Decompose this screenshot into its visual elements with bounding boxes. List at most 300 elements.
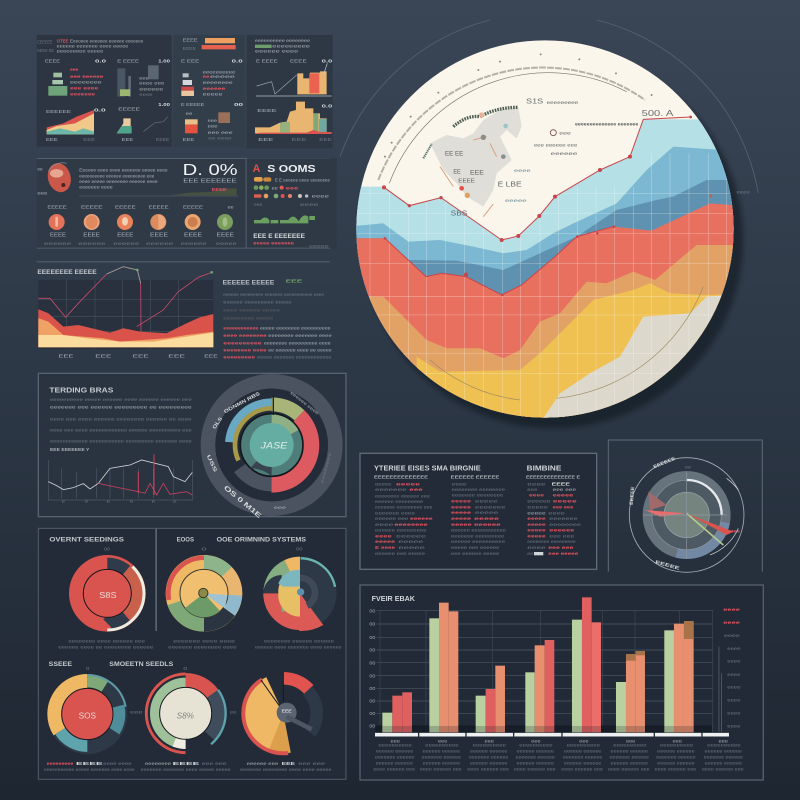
column captions: eeeeeeeeee <box>519 743 553 748</box>
icon row: nutrients: EEEE <box>184 232 202 238</box>
legend rows: ee <box>272 185 278 190</box>
column 3: eee eee <box>548 545 574 550</box>
outer arc <box>340 20 758 193</box>
column captions: eeeeee eeeeee <box>705 749 743 754</box>
column captions: eeeeee eeeeee <box>517 761 555 766</box>
side labels <box>719 607 741 732</box>
legend rows: eeee <box>300 202 319 207</box>
chart: blocks list: EEEE <box>45 59 60 64</box>
map labels: eeee <box>737 189 751 194</box>
header text: EEEE <box>183 38 198 43</box>
column captions: eeeeeeeeee <box>660 743 694 748</box>
column captions: eee <box>579 739 589 744</box>
text block: EEE EEEEEEE Y <box>50 447 89 452</box>
column 2: eeeeeee eeeeeeeee <box>451 533 505 538</box>
captions row 2: eeee eeee <box>103 761 132 766</box>
column 3: eeeee <box>527 528 547 533</box>
chart: right line and area: 0.0 <box>322 103 333 109</box>
text block: notes: eeeeee eeeeeeeee eeeee <box>223 299 292 304</box>
chart: columns small: 1.00 <box>158 102 170 108</box>
column captions <box>373 739 744 772</box>
captions row 1: eeeeeeee eeee eeeeee eee <box>68 639 146 644</box>
chart: stacked area small: EEE <box>83 137 95 142</box>
column 3: eeee <box>527 545 547 550</box>
icon row: nutrients <box>44 205 238 246</box>
donut: ring: USS <box>205 454 219 474</box>
panel: trending donut <box>38 373 346 520</box>
column 3: eeeee <box>553 493 574 498</box>
column 1: eeeeee eeeeeeeee <box>375 528 427 533</box>
column 3: eeeee <box>553 499 578 504</box>
text block: notes: eeeeeeeeeeee <box>223 325 259 330</box>
column captions: eeeeee eeeeee <box>423 761 461 766</box>
donut 1: S8S <box>99 591 117 600</box>
column 2: eeeeee eeeeeeeeeee <box>451 528 507 533</box>
header text: eeeeeeeee eeeee <box>57 48 104 53</box>
column 3: eeee <box>527 481 547 486</box>
text block <box>50 397 193 452</box>
heading: right summary: A <box>253 163 261 175</box>
icon row: nutrients: EEEE <box>83 232 100 238</box>
header text: eeeeee eeee <box>255 49 299 54</box>
icon row: nutrients: EEEEE <box>183 205 203 210</box>
chart: stacked area small: 0.0 <box>94 108 106 114</box>
header text: eeeeeeeee <box>272 44 311 49</box>
chart: middle panel blocks: EEE <box>183 137 194 142</box>
chart: stacked area small <box>46 108 106 142</box>
chart: columns small: EEEE <box>156 137 169 142</box>
chart: middle panel blocks: 0.0 <box>232 59 243 65</box>
column 3: eeeee <box>527 516 547 521</box>
baseline <box>375 729 729 740</box>
column captions: eeeeeee eeeeee <box>516 755 556 760</box>
heading: EEEEEEEE EEEEE <box>37 270 97 276</box>
map labels: eeeeeeeeeeeeee eeeeeee <box>575 121 639 127</box>
column 3: eee eeeee <box>548 551 579 556</box>
captions row 1: eeeeee eeee eeeeeee eeee eeeeee <box>255 644 342 649</box>
column captions: eeeeee eeeeee <box>564 749 602 754</box>
chart: middle panel blocks <box>181 59 243 142</box>
text block: notes: EEE <box>286 279 303 285</box>
headings: 0 <box>183 666 188 671</box>
icon row: nutrients: EEEE <box>50 232 66 238</box>
column 1: eeeee <box>398 545 426 550</box>
column captions: eee <box>626 739 636 744</box>
chart: middle panel blocks: 00 <box>234 102 243 108</box>
column captions: eeeeee eeeeee <box>470 761 508 766</box>
grid <box>340 153 740 420</box>
donut: ring: eeeeeeee <box>319 451 333 484</box>
column 3 <box>526 474 582 556</box>
mini trend: EEEE <box>212 187 227 192</box>
column captions: eeeeeeeeee <box>425 743 459 748</box>
column 3: eeeeee <box>549 528 575 533</box>
column captions: eeeeee eeeeee <box>611 761 649 766</box>
column captions: eeee eeeeee eee <box>514 767 556 772</box>
icon row: nutrients: eeeeee <box>44 241 72 246</box>
column 2: eeeee eee eeeeee <box>451 545 500 550</box>
chart: columns small: 1.00 <box>158 59 170 65</box>
column 2: eeeeee eeeeeeeeee <box>451 539 506 544</box>
chart: middle panel blocks: eeeeeeee <box>203 80 234 85</box>
panel: radar chart <box>608 440 762 572</box>
header text: eeeeee eeeeeee eeee eeeee <box>57 43 129 48</box>
chart: middle panel blocks: eeeeee <box>203 86 226 91</box>
column captions: eeeeee eeeeee <box>423 749 461 754</box>
chart: middle panel blocks: eee <box>208 118 218 123</box>
icon: organ: eee <box>37 190 48 195</box>
panel: radar chart: ee <box>685 464 692 469</box>
column 3: ee <box>527 551 534 556</box>
captions row 2 <box>44 761 332 772</box>
text block: eeeeeeeeeeee eeeeeeeeeee eeeeeeeee eeeeeee eeee <box>50 438 192 443</box>
heading: TERDING BRAS <box>49 385 113 394</box>
column captions: eee <box>531 739 541 744</box>
column captions: eeeeeeeeee <box>378 743 412 748</box>
icon row: nutrients: EEEEE <box>115 205 136 210</box>
line chart: e <box>152 499 156 504</box>
chart: middle panel blocks: E EEE <box>181 59 199 64</box>
legend rows: eeee <box>312 194 330 199</box>
chart: right line and area <box>255 59 333 142</box>
panel: radar chart: EEEEEE <box>652 456 676 469</box>
area chart: EEE <box>133 353 149 358</box>
column captions: eeeeeee eeeeee <box>422 755 462 760</box>
donut 4: SOS <box>79 712 96 721</box>
map: EEEE <box>458 179 475 185</box>
chart: middle panel blocks: eee eee <box>208 130 234 135</box>
icon row: nutrients: eeeee <box>216 241 238 246</box>
text block: notes: eeeeeeeeee <box>223 340 263 345</box>
arc scale <box>378 53 653 183</box>
map labels: SBS <box>451 209 467 218</box>
text block: notes: eeeee eeeeeeee eeeeeeeeee <box>260 325 331 330</box>
column 1: eeee <box>375 522 394 527</box>
area chart: EEE <box>204 353 218 358</box>
column 1: eeeeeeee eeeeee eee <box>375 493 431 498</box>
line chart: e <box>130 499 134 504</box>
layer: dark blue <box>356 180 734 296</box>
chart: middle panel blocks: E EEEEE <box>181 102 204 107</box>
column captions: eeeeee eeeeee <box>517 749 555 754</box>
grid and axis labels: 00 <box>369 622 376 627</box>
layer: grey <box>544 296 722 418</box>
text block: eeeeeee eee eeeeee eeeeeeeee ee eeeeeeeee <box>50 405 193 410</box>
column captions: eeeeeeeeee <box>473 743 507 748</box>
line chart: e <box>85 499 89 504</box>
map labels: 500. A <box>642 108 674 118</box>
big number: D. 0% <box>183 162 238 179</box>
chart: blocks list <box>45 59 106 97</box>
captions row 2: eee eee <box>202 761 228 766</box>
column captions: eeeeeee eeeeee <box>610 755 650 760</box>
layer: red <box>356 203 734 418</box>
donut: ring: JASE <box>259 440 288 450</box>
panel: bar chart <box>360 585 763 780</box>
column 1: eeeee <box>398 539 425 544</box>
side labels: eeee <box>723 620 741 625</box>
area chart: EEE <box>168 353 185 358</box>
map labels: eeeeeeeee <box>547 100 579 105</box>
donut: ring: eeeeee eeee <box>289 390 321 416</box>
side labels: eeee <box>727 697 741 702</box>
chart: middle panel blocks: eeeee <box>210 74 236 79</box>
text block: notes: eeeeeeeee eeeee <box>223 315 274 320</box>
panel: radar chart: EEEEE <box>629 486 635 505</box>
legend rows: eee <box>286 185 299 190</box>
column 1: eee <box>409 487 424 492</box>
grid and axis labels: 00 <box>369 635 376 640</box>
icon row: nutrients: EEEE <box>117 232 134 238</box>
line chart: e <box>107 499 111 504</box>
column 1: eeeee <box>375 539 396 544</box>
map labels: eee eeeeee eee <box>534 143 578 148</box>
text block: intro: eeeeeeeeee eeeeee eeeeeeeee eee <box>79 173 155 178</box>
column 1: eeeeeeee <box>394 522 429 527</box>
column captions: eeee eeeeee eee <box>608 767 650 772</box>
text block: notes: EEEEEE EEEEE <box>223 280 274 286</box>
text block: intro: eeeeeee eeee <box>79 185 113 190</box>
column captions: eee <box>485 739 495 744</box>
text block: notes: eeeeeeee eeeeeeeeee eeee <box>264 340 331 345</box>
column captions: eeee eeeeee eee <box>373 767 416 772</box>
column 3: eeeee <box>527 510 547 515</box>
icon row: nutrients: EEEEE <box>47 205 67 210</box>
chart: blocks list: eeeeeeee <box>70 79 103 84</box>
column 2: eeeee <box>451 510 472 515</box>
panel: trend area chart <box>37 261 332 360</box>
captions row 2: EEEE <box>76 761 103 766</box>
column 2: eeeee <box>451 516 472 521</box>
text block: notes: ee eeeeeee eeee ee eeeee <box>268 348 332 353</box>
caption: EEE E EEEEEEE <box>253 234 305 240</box>
heading: right summary: S OOMS <box>267 164 316 175</box>
donut: ring: OLS <box>212 415 225 430</box>
chart: right line and area: E EEEE <box>256 59 278 64</box>
area chart: EEE <box>95 353 112 358</box>
column 2: eee eeeeee eeeee <box>451 551 500 556</box>
chart: columns small: eeee <box>139 92 153 97</box>
chart: middle panel blocks: ee eeee <box>208 135 233 140</box>
headings: 0 <box>86 666 90 671</box>
chart: middle panel blocks: ee <box>203 74 210 79</box>
column captions: eeeeee eeeeee <box>657 749 695 754</box>
grid and axis labels: 00 <box>369 673 376 678</box>
headings: OOE ORIMNIND SYSTEMS <box>217 537 306 544</box>
icon row: nutrients: eeeeee <box>113 241 140 246</box>
chart: green humps <box>254 215 315 223</box>
column 2: eeeee <box>451 504 472 509</box>
icon: organ: ee <box>37 167 43 172</box>
caption: eeeee eeeeeee <box>253 241 294 247</box>
captions row 1: eeeeeee eeee eeee <box>173 639 236 644</box>
header text: EEEEEE <box>37 39 52 44</box>
column 3: eeeeee <box>527 499 552 504</box>
map labels: eee <box>559 130 572 135</box>
donut 5 <box>146 673 226 753</box>
column captions: eeeeee eeeeee <box>705 761 743 766</box>
column captions: eeee eeeeee eee <box>655 767 697 772</box>
legend rows <box>254 177 331 207</box>
chart: right line and area: EEE <box>319 137 332 142</box>
column captions: eee <box>438 739 448 744</box>
column 2 <box>451 474 507 556</box>
donut: ring: OS 0 M1E <box>222 484 263 520</box>
donut 2 <box>166 555 242 632</box>
column 1: eeeeee eeeeeeeee <box>375 499 424 504</box>
captions row 2: EEEE <box>173 761 200 766</box>
legend rows: eee <box>254 202 263 207</box>
bottom arc <box>430 287 703 400</box>
panel: top small charts <box>37 35 333 148</box>
column captions: eeeeee eeeeee <box>470 749 508 754</box>
text block: intro: eeee eeeee eeeeeeee eeeeee eeee <box>79 179 158 184</box>
column captions: eeeeee eeeeee <box>376 749 414 754</box>
icon row: nutrients: EEEE <box>217 232 234 238</box>
side labels: eeee <box>727 685 741 690</box>
header text: eeeeeeeeee eeeeeeee <box>255 38 311 43</box>
column captions: eee <box>673 739 683 744</box>
captions row 1: eeeeeee eeeeeeee eeee <box>168 644 237 649</box>
chart: right line and area: 0.0 <box>322 59 333 65</box>
text block: intro <box>79 168 168 190</box>
column 1 <box>374 474 434 556</box>
grid and axis labels: 00 <box>369 608 376 613</box>
panel: radar chart: EEEEE <box>655 559 680 571</box>
icon: organ <box>37 161 74 195</box>
column captions: eeeeeeeeee <box>613 743 647 748</box>
line: lower red series <box>384 194 712 296</box>
icon row: nutrients: eeeeee <box>146 241 174 246</box>
layer: tan <box>369 245 733 418</box>
column 1: eeeee <box>375 481 392 486</box>
chart: right line and area: EEEE <box>257 108 277 113</box>
column 2: eeeee <box>451 522 473 527</box>
caption: eeeee <box>309 243 330 248</box>
text block: notes: eeeeeeeee <box>223 355 256 360</box>
text block: notes: eeeeee eeeeeeeee eeeeeee eeeeeeeeeee eeee <box>223 292 325 297</box>
column captions: eeeeee eeeeee <box>657 761 695 766</box>
labels: ee <box>230 709 237 714</box>
text block: intro: Eeeeee eeee eeee eeeeeee eeeee eeee <box>79 168 168 173</box>
column 3: eeeee <box>527 522 547 527</box>
icon row: nutrients: eeeeee <box>181 241 208 246</box>
grid and axis labels: 00 <box>369 699 376 704</box>
mini trend <box>79 187 238 196</box>
column 2: eeeeee <box>474 522 502 527</box>
side labels: eeee <box>727 724 741 729</box>
column captions: eee <box>391 739 401 744</box>
column 2: eeeee <box>474 516 500 521</box>
column 1: eeeee <box>396 481 421 486</box>
text block: eeeeeeeeee eeeee eeeeee eeee eeeeee eeeeee eee <box>50 397 192 402</box>
column 3: eeeeeee <box>549 516 579 521</box>
text block: notes: eeeeeeee eeee <box>223 348 267 353</box>
grid and axis labels: 00 <box>369 661 376 666</box>
side labels: eeee <box>727 710 741 715</box>
column 2: EEEEEE EEEEEE <box>451 474 499 479</box>
column captions: eeeeeee eeeeee <box>656 755 696 760</box>
side labels: eeee <box>727 659 741 664</box>
column 2: eeeee <box>451 499 472 504</box>
icon row: nutrients: EEEE <box>150 232 168 238</box>
column 2: eeeeeeee eeeeeeee <box>452 487 506 492</box>
header text: EEEE <box>183 46 196 51</box>
column captions: eeeeeee eeeeee <box>469 755 509 760</box>
column 1: eeeeee eee eeeee <box>375 551 426 556</box>
area chart: EEE <box>58 353 74 358</box>
labels: eee <box>130 709 144 714</box>
chart: right line and area: EEEE <box>290 59 307 64</box>
captions row 2: eeeeeeeee <box>47 761 74 766</box>
column 3: eeee <box>529 493 545 498</box>
text block: notes: eeee eeeeee eeeee <box>223 308 281 313</box>
layer: light blue <box>356 119 734 418</box>
map labels: eeeee <box>505 198 528 203</box>
header text: Eeeoeee eeeeeee eeeeee eeeeeee <box>70 39 144 44</box>
column 3: EEEE <box>552 481 570 486</box>
headings: 0 <box>201 547 208 552</box>
map labels: S1S <box>526 97 543 106</box>
headings: SSEEE <box>49 661 72 668</box>
chart: columns small: eeee eee <box>139 81 165 86</box>
chart: stacked area small: EEEEEE <box>46 109 71 114</box>
legend rows: E E eeeeee eeee eeeeeeee <box>275 177 331 182</box>
heading: right summary <box>253 163 316 175</box>
chart: middle panel blocks: eee <box>208 124 218 129</box>
column captions: eeeeeee eeeeee <box>563 755 603 760</box>
donut 5: S8% <box>177 711 194 720</box>
layer: mid blue <box>356 146 734 418</box>
headings: 00 <box>296 547 303 552</box>
headings <box>49 537 306 671</box>
header text: EEEE EE <box>37 48 54 53</box>
column captions: eeee eeeeee eee <box>561 767 604 772</box>
column captions: eeeeee eeeeee <box>564 761 602 766</box>
chart: right line and area: EEE <box>292 137 307 142</box>
panel: radar chart: eee <box>730 528 741 533</box>
icon row: nutrients: eeeeee <box>78 241 107 246</box>
captions row 2: eeeeeee eeeeeeee eeee eeee eeeee <box>240 767 332 772</box>
column captions: eeee eeeeee eee <box>467 767 510 772</box>
line chart: e <box>62 499 66 504</box>
side labels: eeee <box>724 633 741 638</box>
chart: columns small: eeeeee <box>139 87 164 92</box>
column 1: E eeee <box>375 545 396 550</box>
text block: notes: eeeeeeee eeeeeee eeee <box>268 333 332 338</box>
donut 6: EEE <box>282 709 292 715</box>
panel: systems table <box>360 453 597 569</box>
captions row 1 <box>58 639 342 649</box>
text block: notes: eeee eeeeeeee <box>223 333 267 338</box>
column 1: eeeeee eee <box>375 516 409 521</box>
header text: OTEE <box>57 39 68 44</box>
donut: ring <box>205 381 335 520</box>
text block: notes: eeeee eeeeeee eeeeeeeeeeee <box>257 355 332 360</box>
column 3: eee eee <box>553 487 577 492</box>
side labels: eeee <box>723 607 741 612</box>
column captions: eeee eeeeee eee <box>702 767 744 772</box>
map: EEE <box>470 170 484 176</box>
column captions: eeeeeee eeeeee <box>375 755 415 760</box>
column captions: eeee eeeeee eee <box>420 767 462 772</box>
column 2: eeeee <box>475 499 499 504</box>
map: EE <box>453 168 461 175</box>
panel: donut grid <box>38 528 346 779</box>
column 1: eeeeeee eeeeeeeee eee <box>375 505 433 510</box>
donut 4 <box>47 674 127 754</box>
map <box>423 107 522 217</box>
